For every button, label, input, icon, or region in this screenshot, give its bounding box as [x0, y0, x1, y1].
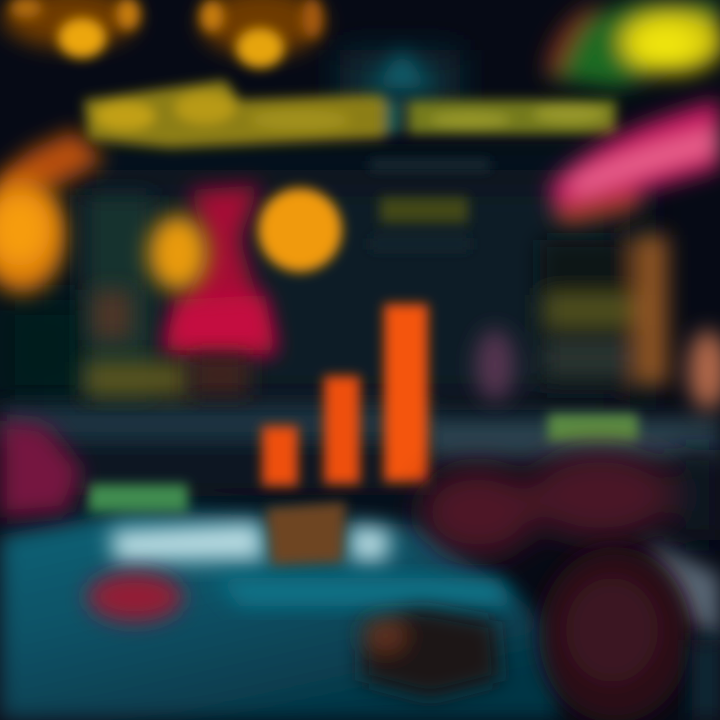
bottom right corner: [692, 640, 720, 720]
middle text blocks: [370, 160, 490, 250]
right panel: [475, 235, 720, 410]
right maroon cluster: [420, 450, 720, 556]
floor band: [0, 405, 720, 720]
title band: [84, 80, 616, 148]
big dark maroon sphere: [539, 547, 691, 720]
central panel with red funnel and lamps: [85, 185, 342, 396]
dark brown rock: [362, 608, 500, 698]
bar chart: [262, 304, 428, 486]
top teal peak: [372, 50, 432, 88]
pale band at right: [645, 540, 720, 640]
green label left: [88, 484, 188, 512]
red oval on floor: [87, 572, 183, 622]
brown pot: [266, 502, 346, 565]
pink awning: [548, 100, 720, 226]
top left lights: [2, 0, 324, 68]
left orange glow and lamp: [0, 130, 105, 293]
white highlight strip: [110, 522, 392, 562]
light teal strip: [215, 578, 515, 606]
top right rainbow arc: [545, 0, 720, 88]
left magenta blob: [0, 420, 82, 518]
green label right: [548, 414, 638, 442]
